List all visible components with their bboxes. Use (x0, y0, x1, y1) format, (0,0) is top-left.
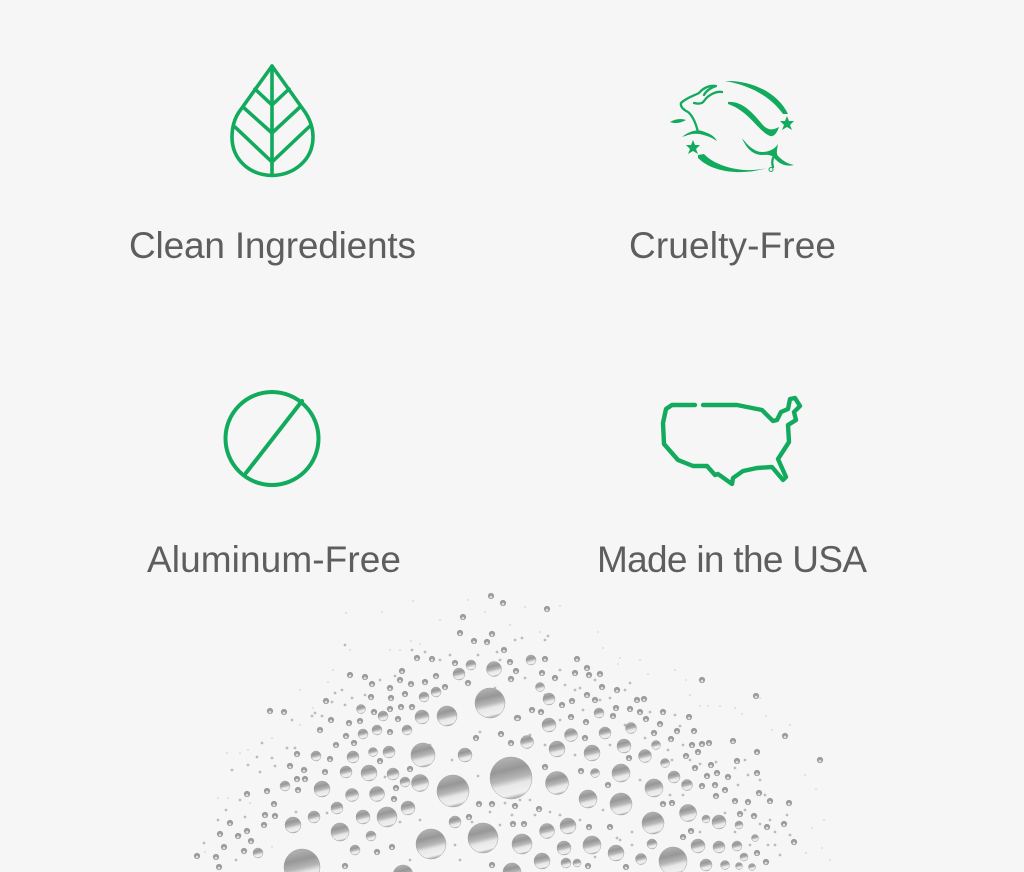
label: clean ingredients: Clean Ingredients (129, 225, 416, 266)
panel: made in the usa (597, 398, 867, 580)
icon: prohibited circle (226, 392, 318, 485)
water droplets (197, 596, 830, 872)
panel: clean ingredients (129, 66, 416, 266)
panel: cruelty-free (629, 81, 836, 266)
icon: leaf (232, 66, 313, 176)
icon: leaping rabbit (670, 81, 794, 172)
label: cruelty-free: Cruelty-Free (629, 225, 836, 266)
panel: aluminum-free (147, 392, 401, 580)
icon: usa map outline (663, 398, 800, 484)
label: made in the usa: Made in the USA (597, 539, 867, 580)
label: aluminum-free: Aluminum-Free (147, 539, 401, 580)
